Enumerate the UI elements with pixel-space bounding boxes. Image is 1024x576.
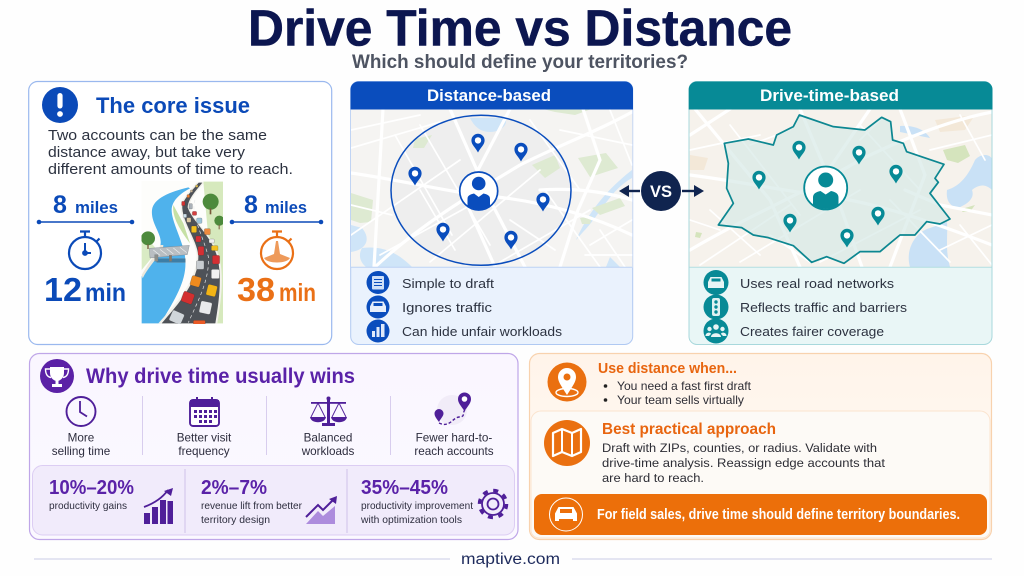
- list: distance use cases: You need a fast first draft: [617, 380, 752, 393]
- stat: productivity improvement: 35%–45%: [361, 477, 448, 499]
- icon: scales: [310, 396, 347, 426]
- metric: congested route: miles: [265, 198, 307, 217]
- stat: productivity improvement: productivity improvement: [361, 500, 473, 512]
- panel: distance-based: [350, 82, 633, 344]
- vs badge with arrows: [619, 171, 704, 211]
- text: creates fairer coverage: Creates fairer coverage: [740, 324, 884, 339]
- heading: use distance when: Use distance when...: [598, 361, 737, 377]
- benefit: balanced workloads: workloads: [301, 445, 354, 458]
- card: best practical approach: [531, 411, 990, 538]
- icon: orange stopwatch: [261, 232, 293, 269]
- benefit: fewer hard-to-reach accounts: [414, 392, 494, 458]
- benefit: better visit frequency: [177, 397, 232, 458]
- benefit: fewer hard-to-reach accounts: Fewer hard-to-: [416, 432, 492, 444]
- stat: productivity gains: productivity gains: [49, 500, 127, 512]
- icon: car: [704, 270, 728, 295]
- panel header: distance-based: [350, 82, 633, 110]
- panel: drive-time-based: [689, 82, 992, 344]
- heading: the core issue: The core issue: [96, 93, 250, 118]
- stat: productivity gains: 10%–20%: [49, 477, 134, 499]
- text: core issue description: different amounts of time to reach.: [48, 162, 293, 178]
- stat: revenue lift: territory design: [201, 514, 270, 526]
- icon: traffic light: [704, 294, 728, 320]
- icon: map pins: [752, 141, 903, 248]
- map: circular radius territory: [351, 109, 633, 268]
- metric: short route: 8: [53, 191, 67, 219]
- stat: productivity improvement: [360, 477, 506, 526]
- benefit: better visit frequency: frequency: [178, 445, 230, 458]
- text: can hide unfair workloads: Can hide unfair workloads: [402, 324, 563, 339]
- icon: clock: [66, 397, 96, 426]
- list: drive-time traits: [690, 267, 992, 344]
- icon: exclamation: [42, 87, 78, 123]
- panel header: drive-time-based: Drive-time-based: [760, 87, 899, 105]
- icon: rising bars: [144, 488, 173, 524]
- panel header: drive-time-based: [689, 82, 992, 110]
- metric: short route: min: [85, 279, 126, 307]
- metric: congested route: [230, 191, 323, 308]
- map: drive-time territory: [690, 109, 992, 268]
- panel: the core issue: [29, 82, 332, 344]
- text: practical approach description: are hard to reach.: [602, 471, 704, 485]
- list: distance use cases: Your team sells virtually: [617, 394, 744, 407]
- text: practical approach description: drive-time analysis. Reassign edge accounts that: [602, 456, 886, 470]
- text: practical approach description: Draft with ZIPs, counties, or radius. Validate with: [602, 441, 877, 455]
- panel: why drive time usually wins: [30, 354, 518, 540]
- icon: trend line: [306, 496, 337, 524]
- list: distance-based traits: [351, 267, 632, 342]
- icon: location pin: [548, 362, 586, 402]
- text: reflects traffic and barriers: Reflects traffic and barriers: [740, 300, 908, 315]
- icon: calendar: [190, 397, 219, 426]
- metric: short route: miles: [75, 198, 118, 217]
- text: ignores traffic: Ignores traffic: [402, 300, 493, 315]
- icon: central rep: [460, 172, 498, 211]
- text: simple to draft: Simple to draft: [402, 276, 494, 291]
- stat: revenue lift: revenue lift from better: [201, 500, 302, 512]
- benefit: fewer hard-to-reach accounts: reach accounts: [414, 445, 494, 458]
- metric: short route: [37, 191, 134, 308]
- icon: folded map: [544, 420, 590, 466]
- icon: people: [704, 318, 728, 344]
- text: practical approach description: [602, 441, 886, 485]
- banner: key takeaway: For field sales, drive time should define territory boundaries.: [597, 507, 960, 523]
- icon: map pins: [408, 134, 550, 250]
- metric: congested route: 38: [237, 271, 275, 308]
- text: core issue description: distance away, but take very: [48, 145, 246, 161]
- panel header: distance-based: Distance-based: [427, 87, 551, 105]
- icon: car: [366, 296, 390, 318]
- panel: recommendations: [530, 354, 992, 540]
- heading: best practical approach: Best practical approach: [602, 421, 776, 438]
- benefit: more selling time: More: [68, 432, 94, 444]
- icon: blue stopwatch: [69, 232, 101, 269]
- benefit: balanced workloads: Balanced: [304, 432, 352, 444]
- icon: gear: [480, 490, 506, 518]
- icon: checklist: [366, 271, 390, 294]
- text: core issue description: [48, 128, 293, 178]
- vs badge with arrows: VS: [650, 183, 672, 201]
- metric: congested route: 8: [244, 191, 258, 219]
- text: uses real road networks: Uses real road networks: [740, 276, 895, 291]
- benefit: more selling time: [52, 397, 110, 458]
- benefit: better visit frequency: Better visit: [177, 432, 232, 444]
- icon: central rep: [804, 166, 847, 211]
- footer: source: maptive.com: [461, 551, 560, 568]
- stat: revenue lift: [201, 477, 337, 526]
- title: Drive Time vs Distance: [248, 0, 792, 56]
- text: core issue description: Two accounts can be the same: [48, 128, 267, 144]
- icon: car: [550, 498, 582, 531]
- stat: productivity improvement: with optimization tools: [360, 514, 462, 526]
- metric: congested route: min: [279, 279, 316, 307]
- stat: revenue lift: 2%–7%: [201, 477, 267, 499]
- illustration: congested road beside a river: [141, 181, 224, 325]
- list: distance use cases: [604, 380, 752, 407]
- icon: bar chart: [366, 320, 390, 342]
- icon: trophy: [40, 359, 74, 393]
- metric: short route: 12: [44, 271, 82, 308]
- stat: productivity gains: [49, 477, 173, 524]
- icon: route with pins: [434, 392, 471, 425]
- heading: why drive time usually wins: Why drive time usually wins: [86, 365, 355, 388]
- benefit: more selling time: selling time: [52, 445, 110, 458]
- subtitle: Which should define your territories?: [352, 51, 688, 73]
- benefit: balanced workloads: [301, 396, 354, 458]
- banner: key takeaway: [534, 494, 987, 535]
- block: use distance when: [548, 361, 752, 407]
- panel: statistics: [32, 466, 514, 535]
